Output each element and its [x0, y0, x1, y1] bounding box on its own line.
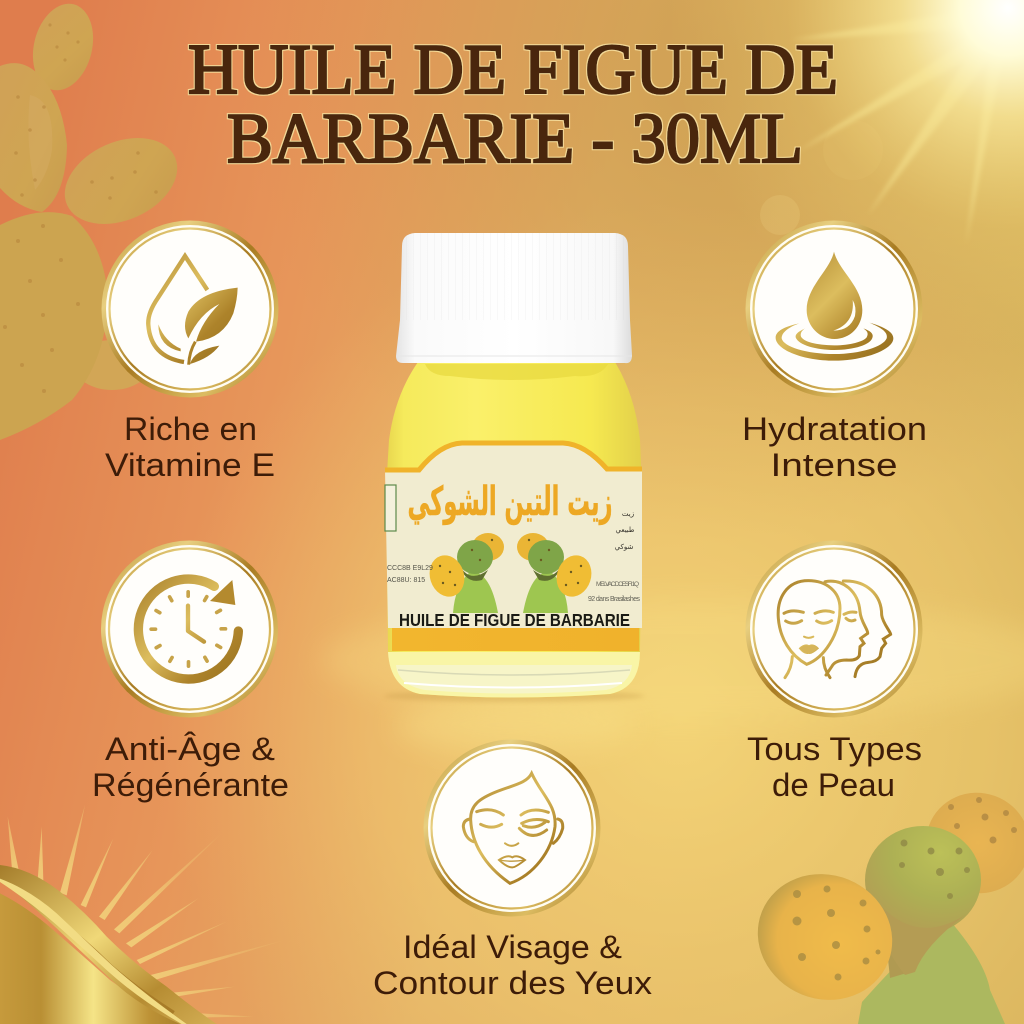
label text	[742, 411, 927, 483]
label text: Idéal Visage &	[403, 929, 622, 965]
small label print right: MELVAC DCESFI 1Q	[596, 581, 639, 588]
medallion ring	[101, 540, 278, 718]
wave dark line	[57, 920, 173, 1013]
label text	[92, 731, 289, 803]
icon: oil drop with ripples	[776, 252, 893, 361]
bottle reflection	[384, 690, 644, 753]
cactus silhouette top left	[0, 0, 191, 440]
small arabic print right: زيت	[622, 510, 634, 518]
label text: Intense	[770, 447, 898, 483]
medallion ring	[424, 740, 600, 916]
product name: HUILE DE FIGUE DE BARBARIE	[399, 610, 630, 630]
medallion ring	[746, 220, 922, 398]
title	[188, 31, 838, 178]
left cactus illustration	[424, 533, 504, 613]
small label print left second line: AC88U: 815	[387, 577, 425, 584]
sunburst rays	[8, 805, 285, 1017]
medallion ring	[746, 540, 922, 718]
small arabic print right: شوكي	[615, 543, 633, 551]
right cactus illustration	[517, 533, 597, 613]
title: HUILE DE FIGUE DE	[188, 31, 838, 109]
bottle of prickly pear oil	[384, 233, 644, 753]
icon: drop and leaf	[148, 256, 238, 365]
label text	[373, 929, 652, 1001]
green logo	[385, 485, 396, 531]
orange band	[392, 628, 639, 651]
icon: clock with arrow	[138, 579, 238, 679]
small arabic print right	[615, 510, 635, 551]
white cap	[396, 233, 632, 363]
label text: Hydratation	[742, 411, 927, 447]
label text	[747, 731, 922, 803]
benefit: Anti-Age	[92, 540, 289, 803]
fruits bottom right	[739, 778, 1024, 1024]
benefit: Hydratation Intense	[742, 220, 927, 483]
label text	[105, 411, 275, 483]
wave fill	[0, 893, 187, 1024]
label text: Tous Types	[747, 731, 922, 767]
wave light stripe	[0, 879, 187, 1024]
benefit: Tous Types de Peau	[746, 540, 922, 803]
golden swoosh with rays bottom left	[0, 805, 285, 1024]
arabic brand name: زيت التين الشوكي	[408, 479, 612, 525]
small arabic print right: طبيعي	[615, 526, 635, 534]
label text: Anti-Âge &	[105, 731, 275, 767]
glass body with oil	[386, 362, 642, 698]
label text: Contour des Yeux	[373, 965, 652, 1001]
label	[385, 443, 642, 651]
icon: face with eye contour	[463, 773, 563, 883]
benefit: Riche en Vitamine E	[102, 220, 278, 483]
small label print left: CCC8B E9L29	[387, 565, 433, 572]
label text: de Peau	[772, 767, 895, 803]
label text: Vitamine E	[105, 447, 275, 483]
label text: Régénérante	[92, 767, 289, 803]
sun glare with rays	[0, 0, 1024, 400]
icon: three faces	[778, 581, 891, 678]
small label print right second line: 92 dans Brasilashes	[588, 596, 640, 603]
benefit: Ideal Visage et Contour des Yeux	[373, 740, 652, 1001]
title: BARBARIE - 30ML	[227, 100, 803, 178]
wave band	[0, 865, 217, 1024]
label text: Riche en	[124, 411, 257, 447]
medallion ring	[102, 220, 278, 398]
